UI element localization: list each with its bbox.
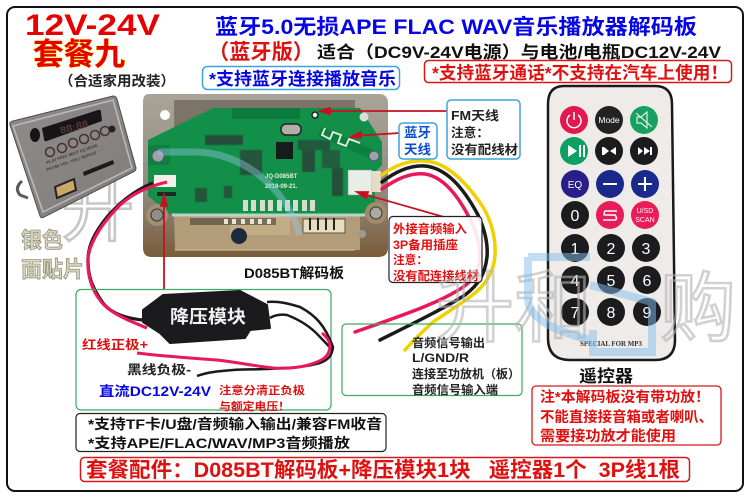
module leads bbox=[137, 302, 333, 376]
callout: FM antenna: 没有配线材 bbox=[451, 142, 519, 157]
decoder board: JQ-D085BT bbox=[265, 174, 298, 180]
icon: silver face panel bbox=[10, 96, 136, 218]
callout: 3P input: 3P备用插座 bbox=[393, 237, 458, 252]
callout: no amplifier note: 注*本解码板没有带功放！ bbox=[540, 388, 710, 406]
panel: voltage module: 降压模块 bbox=[170, 307, 246, 327]
module body bbox=[143, 291, 270, 343]
panel: audio output bbox=[342, 324, 522, 397]
panel: voltage module: 注意分清正负极 bbox=[219, 383, 305, 397]
icon: silver face panel: 88:88 bbox=[59, 119, 90, 137]
wires: red and black to module bbox=[88, 182, 167, 328]
connector bottom bbox=[303, 219, 345, 233]
remote buttons: 4 bbox=[571, 273, 580, 290]
callout: FM antenna: 注意： bbox=[451, 125, 489, 140]
callout: bluetooth antenna: 蓝牙 bbox=[404, 125, 431, 140]
callout: no amplifier note: 需要接功放才能使用 bbox=[540, 427, 676, 445]
right white connector bbox=[348, 170, 372, 195]
remote buttons: 5 bbox=[607, 273, 616, 290]
silver label: 银色 bbox=[21, 228, 63, 253]
remote buttons: SCAN bbox=[635, 217, 655, 224]
wires: audio 3P bbox=[355, 161, 495, 350]
remote buttons: 8 bbox=[607, 305, 616, 322]
callout: 3P input: 注意： bbox=[393, 252, 428, 267]
watermark: right glyphs: 和 bbox=[514, 264, 592, 352]
remote buttons: Mode bbox=[598, 115, 620, 125]
subtitle line bbox=[208, 41, 722, 64]
components bbox=[195, 135, 343, 202]
remote buttons: 0 bbox=[571, 208, 580, 225]
icon: silver face panel: PAUSE VOL- VOL+ REPEAT bbox=[46, 150, 98, 172]
remote buttons: 9 bbox=[643, 305, 652, 322]
decoder board bbox=[143, 94, 388, 257]
panel: feature list: *支持APE/FLAC/WAV/MP3音频播放 bbox=[88, 435, 350, 451]
panel: voltage module: 红线正极+ bbox=[82, 337, 148, 352]
subtitle line: 适合（DC9V-24V电源）与电池/电瓶DC12V-24V bbox=[317, 42, 722, 62]
crystal bbox=[281, 124, 301, 135]
remote buttons: 2 bbox=[607, 241, 616, 258]
remote control: SPECIAL FOR MP3 bbox=[580, 340, 642, 348]
remote buttons: 1 bbox=[571, 241, 580, 258]
watermark: right glyphs: 购 bbox=[660, 267, 736, 352]
watermark: right glyphs bbox=[436, 264, 736, 352]
callout: bluetooth call: *支持蓝牙通话*不支持在汽车上使用！ bbox=[432, 63, 728, 83]
silver label: 面贴片 bbox=[21, 257, 84, 282]
metal plate bbox=[143, 94, 388, 257]
subtitle: home use: （合适家用改装） bbox=[59, 73, 175, 89]
watermark shield bbox=[528, 257, 652, 352]
arrows: board callouts bbox=[161, 108, 447, 289]
callout: bluetooth antenna bbox=[399, 123, 437, 159]
chip bbox=[276, 142, 293, 159]
callout: 3P input: 没有配连接线材 bbox=[393, 268, 479, 283]
watermark: left glyph: 升 bbox=[62, 171, 134, 251]
antenna bbox=[318, 127, 374, 158]
silver label bbox=[21, 228, 84, 282]
remote buttons: U/SD bbox=[637, 208, 653, 215]
remote buttons: 3 bbox=[642, 241, 651, 258]
remote control bbox=[548, 86, 675, 360]
panel: feature list: *支持TF卡/U盘/音频输入输出/兼容FM收音 bbox=[88, 416, 382, 432]
panel: audio output: 音频信号输出 bbox=[412, 335, 485, 350]
subtitle line: （蓝牙版） bbox=[208, 41, 314, 64]
callout: FM antenna: FM天线 bbox=[451, 108, 500, 123]
pin row bbox=[243, 200, 315, 211]
callout: bluetooth playback: *支持蓝牙连接播放音乐 bbox=[209, 69, 396, 89]
mounting holes bbox=[160, 110, 170, 120]
remote buttons: 7 bbox=[571, 305, 580, 322]
callout: 3P input bbox=[389, 216, 482, 283]
panel: voltage module: 与额定电压！ bbox=[219, 399, 290, 413]
callout: no amplifier note bbox=[532, 386, 721, 445]
strip bbox=[172, 214, 365, 216]
main title: 蓝牙5.0无损APE FLAC WAV音乐播放器解码板 bbox=[215, 15, 697, 39]
panel: voltage module: 直流DC12V-24V bbox=[99, 383, 211, 399]
remote buttons: 6 bbox=[643, 273, 652, 290]
panel: audio output: L/GND/R bbox=[412, 351, 469, 365]
PCB bbox=[148, 108, 382, 214]
remote buttons: EQ bbox=[568, 180, 582, 191]
remote buttons bbox=[560, 106, 661, 326]
title: voltage: 12V-24V bbox=[25, 9, 160, 42]
title: package nine: 套餐九 bbox=[33, 37, 125, 72]
callout: 3P input: 外接音频输入 bbox=[393, 221, 467, 236]
callout: no amplifier note: 不能直接接音箱或者喇叭、 bbox=[540, 408, 713, 426]
panel: audio output: 连接至功放机（板） bbox=[412, 366, 520, 381]
panel: audio output: 音频信号输入端 bbox=[412, 382, 498, 397]
panel: package contents: 套餐配件：D085BT解码板+降压模块1块 遥控器1个 3P线1根 bbox=[86, 459, 680, 482]
label: D085BT: D085BT解码板 bbox=[244, 265, 344, 281]
watermark: right glyphs: 升 bbox=[436, 264, 514, 352]
panel: voltage module bbox=[76, 290, 333, 413]
translucent watermark band bbox=[158, 152, 300, 235]
callout: FM antenna bbox=[447, 100, 520, 159]
label: remote: 遥控器 bbox=[579, 367, 633, 386]
decoder board: 2018-09-21. bbox=[265, 184, 298, 190]
icon: silver face panel: PLAY PREV NEXT EQ MODE bbox=[46, 143, 99, 165]
panel: voltage module: 黑线负极- bbox=[127, 362, 191, 377]
panel: feature list bbox=[76, 414, 386, 452]
left white connector bbox=[154, 175, 176, 187]
callout: bluetooth antenna: 天线 bbox=[404, 142, 431, 157]
